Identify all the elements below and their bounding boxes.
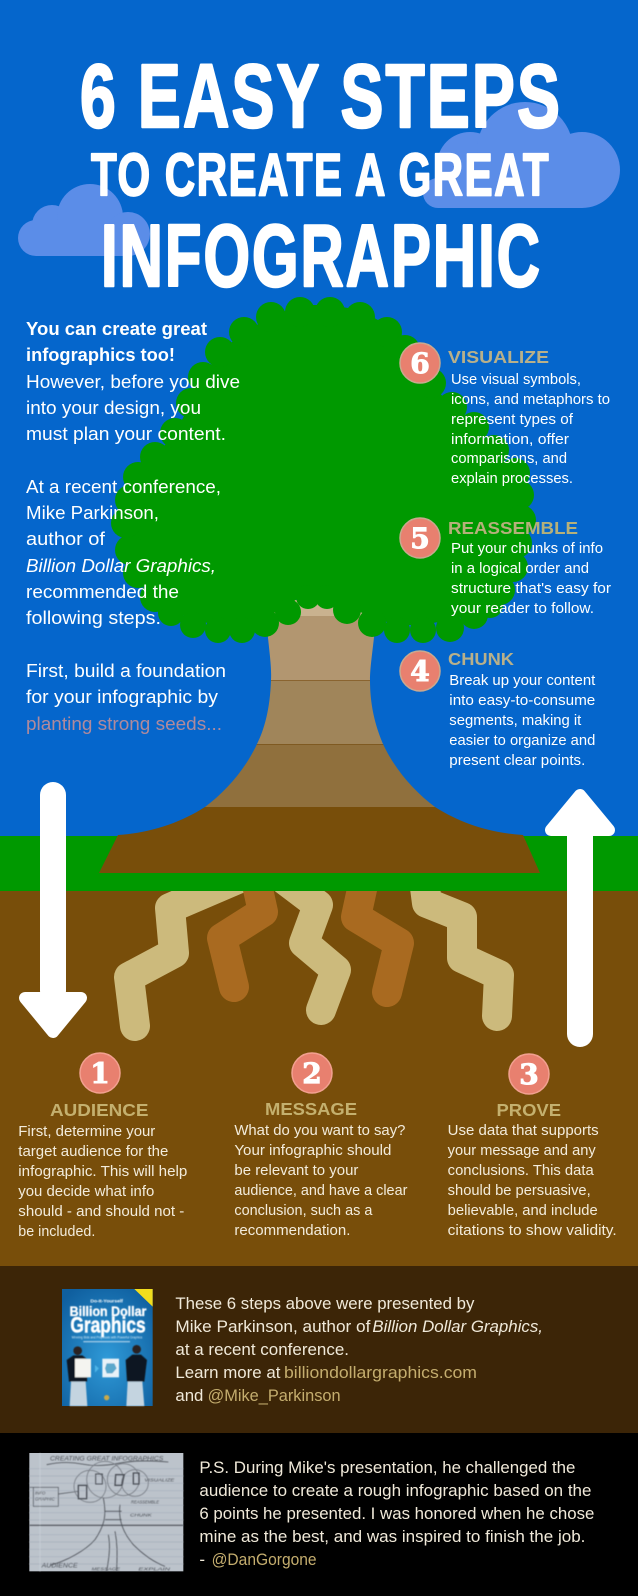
body prove: should be persuasive,: [448, 1183, 591, 1199]
postscript text: [199, 1458, 594, 1569]
body chunk: [449, 673, 595, 769]
body visualize: information, offer: [451, 432, 569, 448]
tree foliage: [111, 297, 536, 643]
arrow: down: [25, 782, 81, 1032]
body prove: your message and any: [448, 1143, 596, 1159]
step 2: message: [234, 1053, 408, 1239]
badge 2: 2: [302, 1057, 322, 1090]
intro text block: must plan your content.: [26, 423, 226, 444]
book cover: [62, 1289, 153, 1406]
tree trunk: [90, 600, 550, 873]
intro text block: First, build a foundation: [26, 660, 226, 681]
intro text block: recommended the: [26, 581, 179, 602]
heading visualize: VISUALIZE: [448, 347, 549, 367]
panel: book credit: [0, 1266, 638, 1433]
step 1: audience: [18, 1053, 187, 1240]
postscript text: audience to create a rough infographic based on the: [199, 1481, 591, 1500]
intro text block: following steps.: [26, 607, 161, 628]
heading audience: AUDIENCE: [50, 1100, 148, 1120]
book credit text: [175, 1294, 543, 1405]
body reassemble: [451, 541, 611, 617]
intro text block: However, before you dive: [26, 371, 240, 392]
root 4: [356, 880, 399, 992]
body prove: [448, 1123, 617, 1239]
sketch photo: GRAPHIC: [35, 1497, 56, 1502]
ground: grass band: [0, 836, 638, 892]
book credit text: billiondollargraphics.com: [284, 1363, 477, 1382]
intro text block: author of: [26, 528, 106, 549]
body chunk: into easy-to-consume: [449, 693, 595, 709]
body visualize: [451, 372, 610, 487]
book credit text: at a recent conference.: [175, 1340, 349, 1359]
book credit text: These 6 steps above were presented by: [175, 1294, 475, 1313]
heading message: MESSAGE: [265, 1099, 357, 1119]
book credit text: Billion Dollar Graphics,: [372, 1317, 543, 1336]
body prove: conclusions. This data: [448, 1163, 595, 1179]
badge 6: 6: [410, 347, 430, 380]
postscript text: -: [199, 1550, 205, 1569]
intro text block: for your infographic by: [26, 686, 219, 707]
body reassemble: Put your chunks of info: [451, 541, 603, 557]
body audience: First, determine your: [18, 1124, 155, 1140]
sketch photo: [29, 1453, 183, 1573]
book credit text: Mike Parkinson, author of: [175, 1317, 371, 1336]
book cover: Winning Bids and Proposals with Powerful Graphics: [72, 1336, 143, 1340]
body chunk: easier to organize and: [449, 733, 595, 749]
badge 3: [509, 1054, 549, 1094]
root 1: [129, 878, 240, 1026]
intro text block: [26, 318, 240, 734]
body message: Your infographic should: [234, 1143, 391, 1159]
badge 1: [80, 1053, 120, 1093]
cloud: right: [423, 102, 620, 208]
root 2: [222, 880, 263, 987]
heading prove: PROVE: [496, 1100, 561, 1120]
body chunk: present clear points.: [449, 753, 585, 769]
body prove: believable, and include: [448, 1203, 598, 1219]
badge 5: [400, 518, 440, 558]
badge 5: 5: [410, 522, 430, 555]
title: [80, 47, 562, 305]
intro text block: At a recent conference,: [26, 476, 221, 497]
body audience: be included.: [18, 1224, 95, 1240]
sketch photo: CHUNK: [130, 1513, 153, 1518]
postscript text: 6 points he presented. I was honored when he chose: [199, 1504, 594, 1523]
step 6: visualize: [400, 343, 610, 487]
body visualize: icons, and metaphors to: [451, 392, 610, 408]
arrow: up: [551, 795, 609, 1047]
body chunk: segments, making it: [449, 713, 581, 729]
body audience: should - and should not -: [18, 1204, 184, 1220]
book credit text: and: [175, 1386, 203, 1405]
body message: What do you want to say?: [234, 1123, 405, 1139]
body visualize: explain processes.: [451, 471, 573, 487]
book cover: Billion Dollar: [70, 1304, 147, 1319]
root 5: [424, 880, 499, 1016]
body chunk: Break up your content: [449, 673, 595, 689]
background: sky: [0, 0, 638, 836]
ground: soil: [0, 891, 638, 1266]
sketch photo: INFO: [35, 1491, 46, 1496]
body message: recommendation.: [234, 1223, 350, 1239]
sketch photo: VISUALIZE: [144, 1477, 175, 1482]
heading reassemble: REASSEMBLE: [448, 518, 578, 538]
body reassemble: structure that's easy for: [451, 581, 611, 597]
badge 3: 3: [519, 1058, 539, 1091]
sketch photo: EXPLAIN: [138, 1567, 171, 1573]
body audience: target audience for the: [18, 1144, 168, 1160]
body visualize: Use visual symbols,: [451, 372, 581, 388]
body message: audience, and have a clear: [234, 1183, 408, 1199]
intro text block: into your design, you: [26, 397, 201, 418]
step 4: chunk: [400, 649, 595, 769]
sketch photo: CREATING GREAT INFOGRAPHICS: [50, 1456, 164, 1463]
badge 2: [292, 1053, 332, 1093]
step 3: prove: [448, 1054, 617, 1239]
intro text block: Billion Dollar Graphics,: [26, 555, 216, 576]
sketch photo: MESSAGE: [92, 1567, 121, 1573]
postscript text: @DanGorgone: [212, 1550, 317, 1569]
body visualize: comparisons, and: [451, 451, 567, 467]
body audience: infographic. This will help: [18, 1164, 187, 1180]
step 5: reassemble: [400, 518, 611, 617]
book cover: Graphics: [70, 1313, 146, 1338]
book credit text: @Mike_Parkinson: [208, 1386, 341, 1405]
body reassemble: in a logical order and: [451, 561, 589, 577]
body audience: you decide what info: [18, 1184, 154, 1200]
heading chunk: CHUNK: [448, 649, 514, 669]
book credit text: Learn more at: [175, 1363, 281, 1382]
body message: conclusion, such as a: [234, 1203, 373, 1219]
tree roots: [129, 878, 499, 1026]
body message: [234, 1123, 408, 1239]
intro text block: planting strong seeds...: [26, 713, 222, 734]
badge 6: [400, 343, 440, 383]
body visualize: represent types of: [451, 412, 574, 428]
body audience: [18, 1124, 187, 1240]
body prove: Use data that supports: [448, 1123, 599, 1139]
badge 1: 1: [90, 1057, 110, 1090]
sketch photo: AUDIENCE: [41, 1563, 79, 1569]
body reassemble: your reader to follow.: [451, 601, 594, 617]
intro text block: Mike Parkinson,: [26, 502, 159, 523]
badge 4: [400, 651, 440, 691]
panel: postscript: [0, 1433, 638, 1596]
postscript text: P.S. During Mike's presentation, he challenged the: [199, 1458, 575, 1477]
postscript text: mine as the best, and was inspired to finish the job.: [199, 1527, 585, 1546]
body prove: citations to show validity.: [448, 1223, 617, 1239]
root 3: [285, 880, 336, 1010]
sketch photo: REASSEMBLE: [131, 1499, 160, 1504]
intro text block: You can create great: [26, 318, 207, 339]
badge 4: 4: [410, 655, 430, 688]
cloud: left: [18, 184, 150, 256]
body message: be relevant to your: [234, 1163, 359, 1179]
intro text block: infographics too!: [26, 344, 175, 365]
book cover: Do-It-Yourself: [90, 1299, 123, 1305]
